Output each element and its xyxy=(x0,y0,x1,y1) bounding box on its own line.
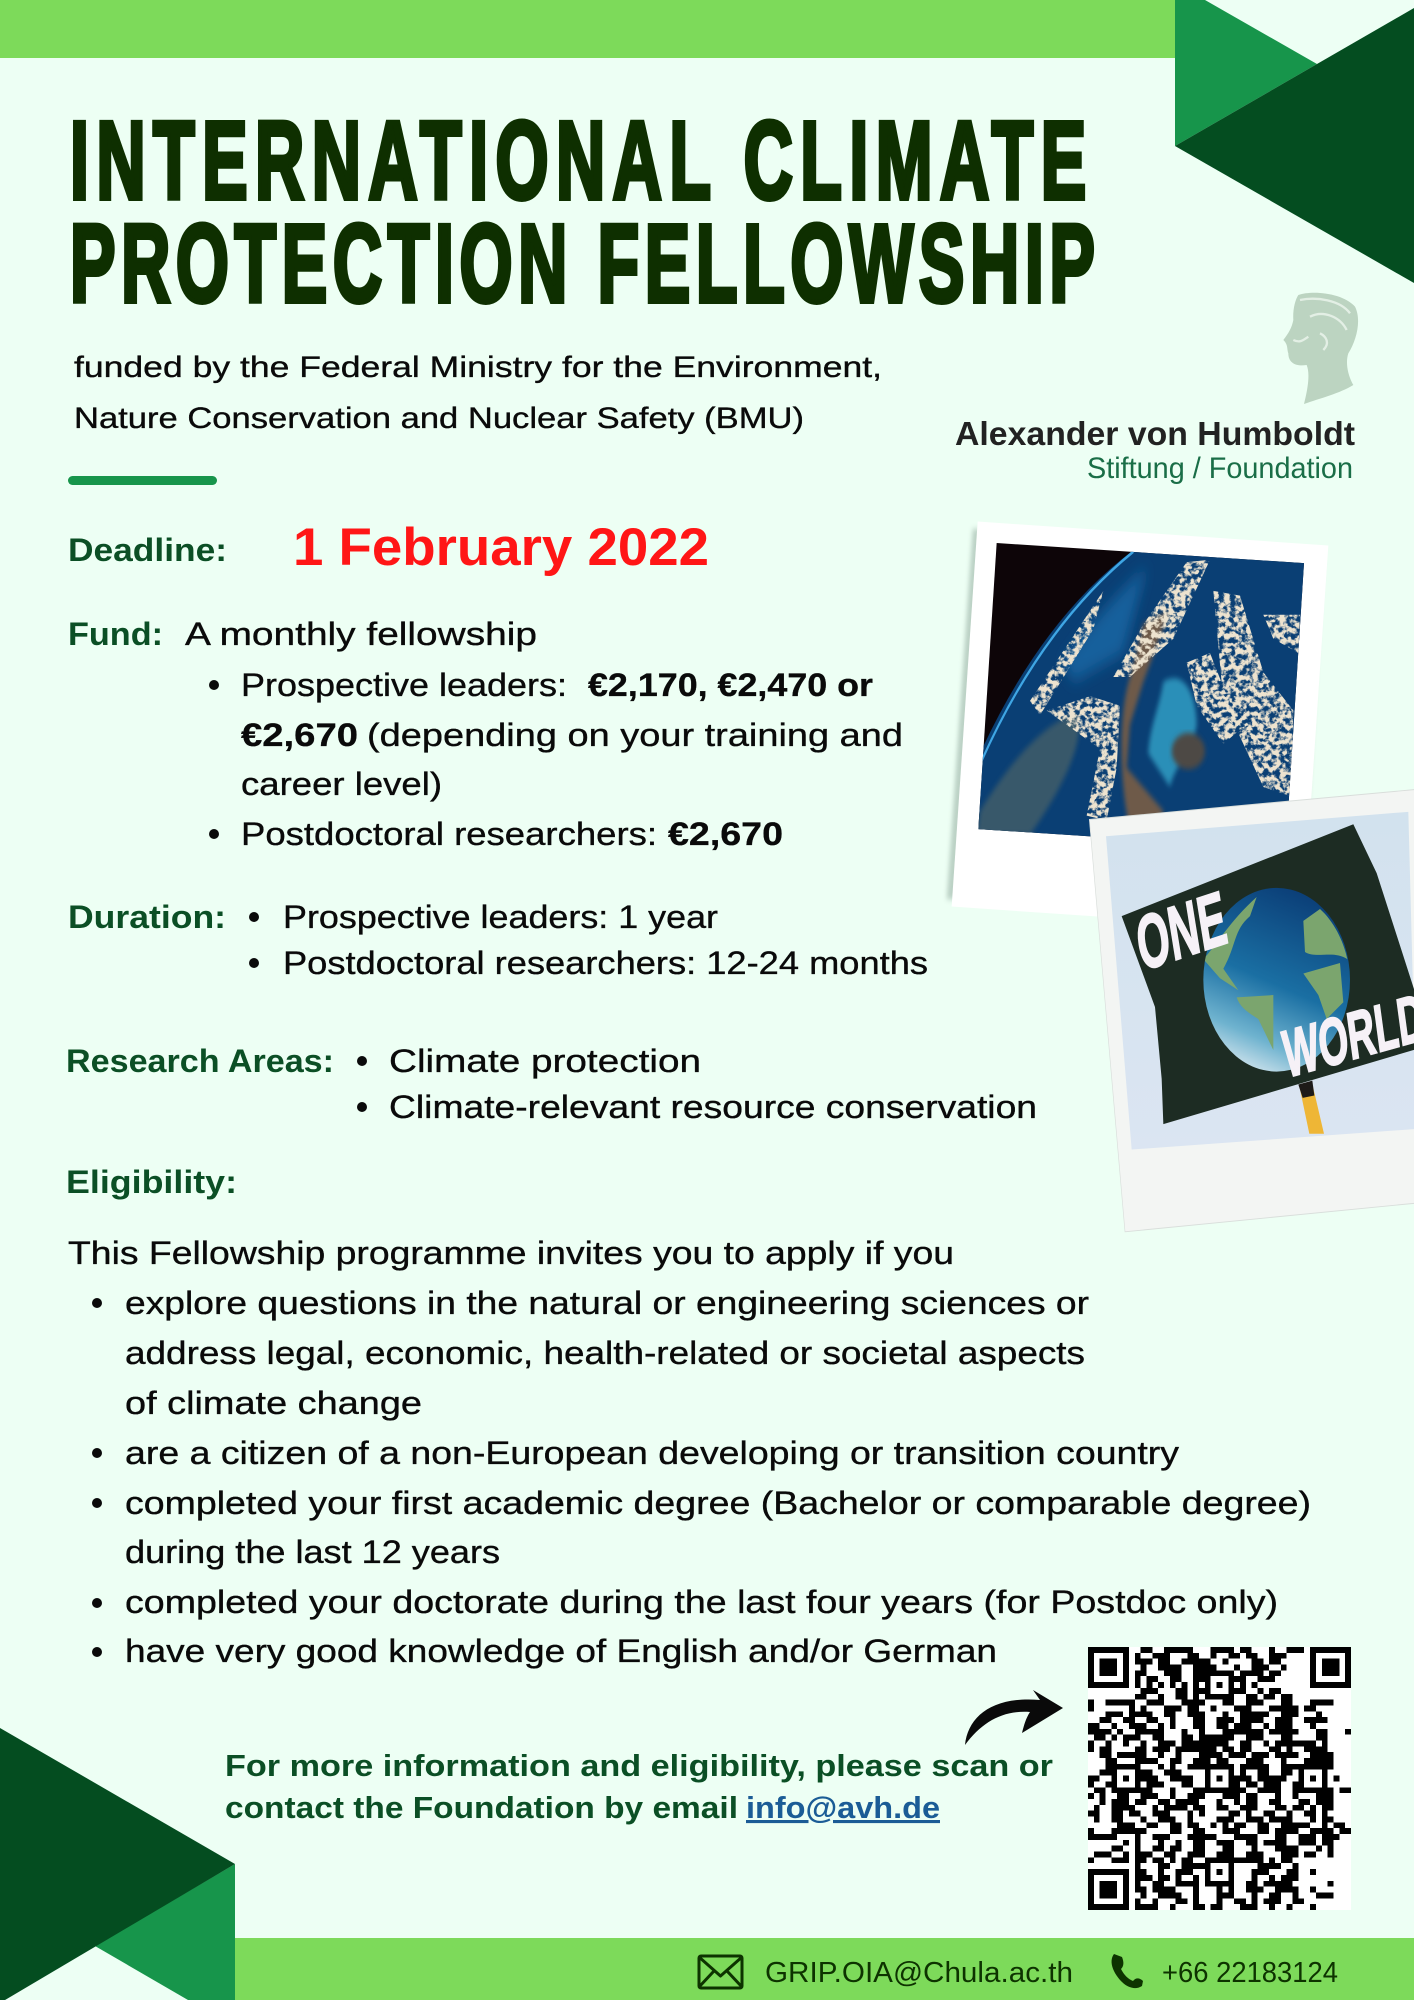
icon: envelope xyxy=(699,1956,742,1988)
fund section: Postdoctoral researchers: xyxy=(241,816,657,852)
bottom contact bar xyxy=(235,1938,1414,2000)
title xyxy=(70,100,1095,326)
photo: One World placard polaroid xyxy=(1089,789,1414,1232)
research areas section xyxy=(66,1043,1037,1125)
eligibility section: have very good knowledge of English and/or German xyxy=(125,1633,997,1669)
fund section: €2,170, €2,470 or xyxy=(588,667,873,703)
eligibility section: during the last 12 years xyxy=(125,1534,500,1570)
painted globe xyxy=(1203,888,1350,1072)
top green bar xyxy=(0,0,1175,58)
placard lettering xyxy=(1131,874,1414,1093)
eligibility section: completed your first academic degree (Bachelor or comparable degree) xyxy=(125,1485,1311,1521)
deadline: Deadline: xyxy=(68,532,227,568)
fund section: A monthly fellowship xyxy=(185,616,537,652)
duration section: Duration: xyxy=(68,899,226,935)
subtitle: Nature Conservation and Nuclear Safety (BMU) xyxy=(74,402,804,435)
eligibility section xyxy=(66,1164,1311,1669)
bottom-left corner triangles xyxy=(0,1728,235,2000)
bottom contact bar: GRIP.OIA@Chula.ac.th xyxy=(765,1957,1073,1989)
eligibility section: of climate change xyxy=(125,1385,422,1421)
eligibility section: explore questions in the natural or engineering sciences or xyxy=(125,1285,1089,1321)
fund section: (depending on your training and xyxy=(367,717,903,753)
eligibility section: are a citizen of a non-European developing or transition country xyxy=(125,1435,1179,1471)
call to action: contact the Foundation by email xyxy=(225,1790,738,1825)
eligibility section: completed your doctorate during the last four years (for Postdoc only) xyxy=(125,1584,1278,1620)
research areas section: Climate-relevant resource conservation xyxy=(389,1089,1037,1125)
eligibility section: address legal, economic, health-related or societal aspects xyxy=(125,1335,1085,1371)
fund section: career level) xyxy=(241,766,442,802)
photo: Earth from space polaroid xyxy=(947,522,1328,930)
placard lettering: ONE xyxy=(1131,874,1232,987)
call to action: info@avh.de xyxy=(746,1790,940,1825)
icon: telephone xyxy=(1112,1954,1143,1988)
subtitle xyxy=(74,351,882,435)
fund section: €2,670 xyxy=(668,816,783,852)
eligibility section: Eligibility: xyxy=(66,1164,237,1200)
placard pole xyxy=(1298,1081,1324,1134)
research areas section: Climate protection xyxy=(389,1043,701,1079)
call to action: For more information and eligibility, please scan or xyxy=(225,1748,1053,1783)
bottom contact bar: +66 22183124 xyxy=(1162,1957,1338,1989)
duration section: Prospective leaders: 1 year xyxy=(283,899,718,935)
subtitle: funded by the Federal Ministry for the Environment, xyxy=(74,351,882,384)
logo: Alexander von Humboldt Foundation xyxy=(955,293,1358,485)
accent divider xyxy=(68,476,217,485)
fund section xyxy=(68,616,903,852)
fund section: Fund: xyxy=(68,616,163,652)
fund section: Prospective leaders: xyxy=(241,667,567,703)
logo: Alexander von Humboldt Foundation: Stiftung / Foundation xyxy=(1087,452,1353,485)
duration section: Postdoctoral researchers: 12-24 months xyxy=(283,945,928,981)
top-right corner triangles xyxy=(1175,0,1414,283)
duration section xyxy=(68,899,928,981)
fund section: €2,670 xyxy=(241,717,358,753)
call to action xyxy=(225,1748,1053,1825)
QR code xyxy=(1088,1647,1351,1910)
placard banner xyxy=(1122,824,1414,1124)
title: PROTECTION FELLOWSHIP xyxy=(70,203,1095,326)
icon: Humboldt head profile xyxy=(1283,293,1358,404)
research areas section: Research Areas: xyxy=(66,1043,334,1079)
deadline: 1 February 2022 xyxy=(293,518,709,577)
eligibility section: This Fellowship programme invites you to apply if you xyxy=(68,1235,954,1271)
title: INTERNATIONAL CLIMATE xyxy=(70,100,1086,223)
deadline xyxy=(68,518,709,577)
arrow to QR code xyxy=(965,1690,1063,1745)
logo: Alexander von Humboldt Foundation: Alexander von Humboldt xyxy=(955,415,1355,452)
